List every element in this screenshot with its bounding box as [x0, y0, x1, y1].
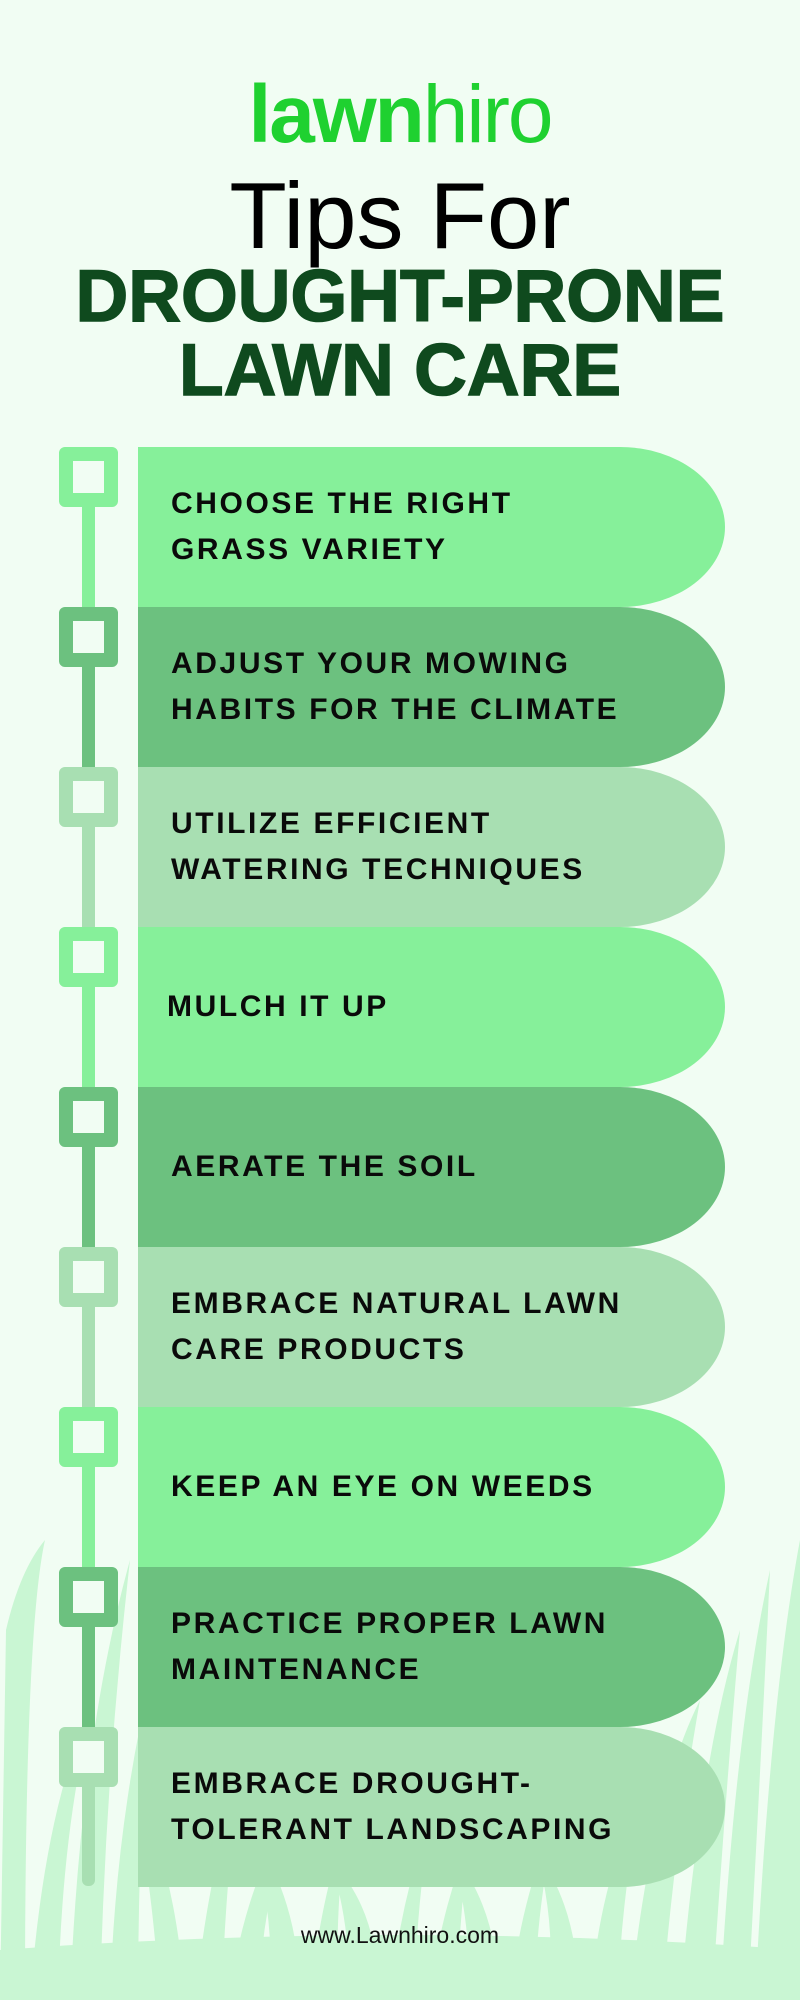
panel: mulch: MULCH IT UP: [167, 990, 389, 1023]
panel: watering: UTILIZE EFFICIENT: [171, 807, 492, 840]
footer url: www.Lawnhiro.com: [301, 1922, 499, 1948]
background grass: [0, 1540, 800, 2000]
panel: mowing: [138, 607, 725, 767]
panel: landscaping: EMBRACE DROUGHT-: [171, 1767, 533, 1800]
title: Tips For: Tips For: [229, 163, 571, 268]
panel: weeds: KEEP AN EYE ON WEEDS: [171, 1470, 595, 1503]
title: Drought-Prone Lawn Care: DROUGHT-PRONE: [76, 256, 724, 337]
panel: maintenance: [138, 1567, 725, 1727]
panel: aerate: [138, 1087, 725, 1247]
title: Drought-Prone Lawn Care: [76, 256, 724, 411]
panel: mowing: HABITS FOR THE CLIMATE: [171, 693, 619, 726]
panel: watering: WATERING TECHNIQUES: [171, 853, 585, 886]
panel: landscaping: TOLERANT LANDSCAPING: [171, 1813, 614, 1846]
timeline: [59, 447, 118, 1886]
panel: choose grass: [138, 447, 725, 607]
panel: maintenance: MAINTENANCE: [171, 1653, 421, 1686]
panel: aerate: AERATE THE SOIL: [171, 1150, 478, 1183]
panel: natural products: EMBRACE NATURAL LAWN: [171, 1287, 622, 1320]
panel: natural products: CARE PRODUCTS: [171, 1333, 466, 1366]
panel: landscaping: [138, 1727, 725, 1887]
title: Drought-Prone Lawn Care: LAWN CARE: [179, 330, 621, 411]
logo: lawnhiro: [248, 69, 552, 160]
panel: choose grass: GRASS VARIETY: [171, 533, 448, 566]
panel: choose grass: CHOOSE THE RIGHT: [171, 487, 513, 520]
panel: natural products: [138, 1247, 725, 1407]
panel: mowing: ADJUST YOUR MOWING: [171, 647, 571, 680]
panel: mulch: [138, 927, 725, 1087]
panel: maintenance: PRACTICE PROPER LAWN: [171, 1607, 608, 1640]
panel: weeds: [138, 1407, 725, 1567]
panel: watering: [138, 767, 725, 927]
